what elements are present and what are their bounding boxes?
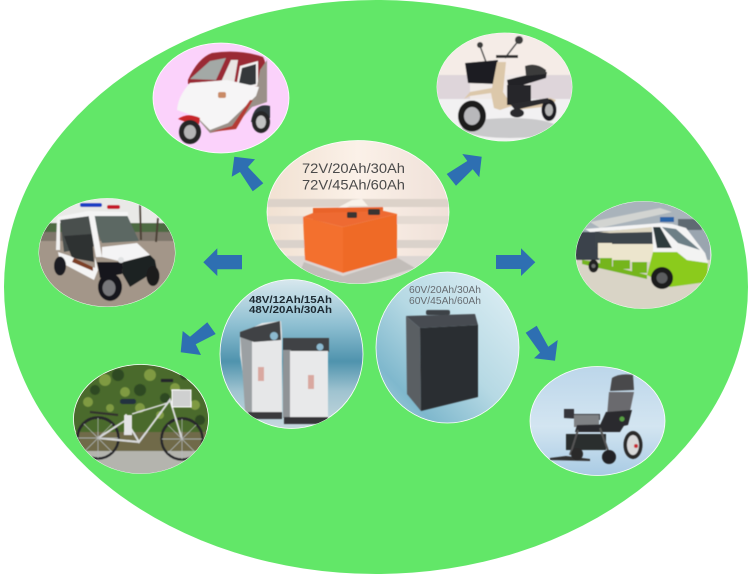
- photo circle: enclosed pink three-wheeler: [153, 43, 289, 153]
- arrow: to scooter: [447, 154, 482, 186]
- label: 48V capacities: [249, 296, 332, 313]
- label: 60V capacities: [410, 286, 480, 304]
- label: 72V capacities: 72V/20Ah/30Ah: [302, 161, 405, 176]
- photo circle: green and white sightseeing bus: [575, 200, 715, 312]
- photo circle: powered wheelchair: [530, 366, 665, 476]
- label: 60V capacities: 60V/45Ah/60Ah: [409, 295, 481, 307]
- label: 60V capacities: 60V/20Ah/30Ah: [409, 284, 481, 296]
- center circle: 72V orange battery: [262, 140, 452, 288]
- battery circle: 48V silver packs: [220, 280, 363, 428]
- arrow: to electric bicycle: [181, 322, 216, 355]
- label: 48V capacities: 48V/12Ah/15Ah: [249, 294, 332, 306]
- arrow: to wheelchair: [526, 326, 558, 361]
- arrow: to police car: [203, 248, 242, 276]
- photo circle: electric bicycle: [70, 364, 215, 476]
- label: 72V capacities: 72V/45Ah/60Ah: [302, 178, 405, 192]
- arrow: to sightseeing bus: [496, 248, 535, 276]
- label: 72V capacities: [302, 163, 404, 190]
- photo circle: beige three-wheel scooter: [435, 30, 575, 144]
- battery circle: 60V dark grey pack: [376, 272, 519, 423]
- photo circle: white police patrol car: [38, 198, 176, 307]
- arrow: to enclosed three-wheeler: [232, 157, 263, 191]
- label: 48V capacities: 48V/20Ah/30Ah: [249, 304, 332, 316]
